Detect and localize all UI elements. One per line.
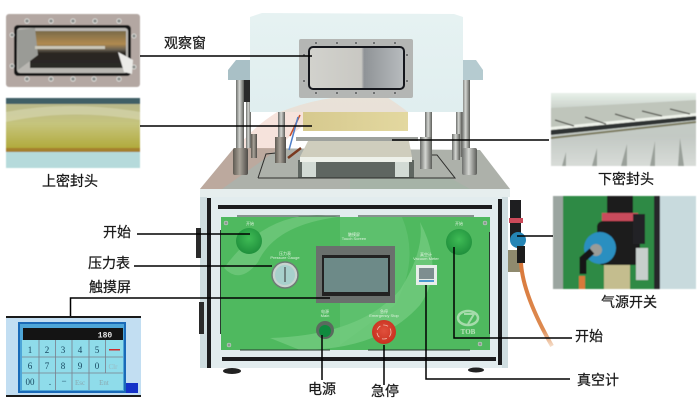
- small panel captions: [246, 220, 463, 318]
- keypad: −: [61, 376, 67, 386]
- outer columns: [236, 80, 470, 158]
- watermark arc behind machine: [205, 100, 325, 205]
- photo: air switch closeup: [553, 196, 696, 289]
- small panel captions: 电源: [321, 308, 329, 314]
- label: start right: 开始: [575, 328, 603, 344]
- emergency stop: [372, 320, 396, 344]
- panel edge marks: [220, 216, 490, 350]
- power button: [316, 321, 334, 339]
- cabinet body: [200, 197, 508, 368]
- keypad: 7: [45, 361, 50, 371]
- green control panel: [220, 215, 490, 350]
- panel swoosh watermark: [224, 215, 432, 350]
- label: lower seal head: 下密封头: [598, 171, 654, 187]
- keypad: 00: [26, 377, 35, 387]
- TOB logo: TOB: [461, 328, 476, 336]
- keypad: 6: [28, 361, 33, 371]
- label: air source switch: 气源开关: [601, 294, 657, 310]
- label: pressure gauge: 压力表: [88, 255, 130, 271]
- keypad: 4: [78, 345, 83, 355]
- touch screen: [316, 246, 395, 303]
- frame dark rails: [207, 198, 502, 368]
- inner columns: [278, 112, 462, 157]
- label: power: 电源: [308, 381, 336, 397]
- callout leader lines: [70, 56, 572, 385]
- keypad: Clr: [109, 363, 118, 371]
- keypad: 5: [95, 345, 100, 355]
- wires: [288, 115, 301, 158]
- small panel captions: Main: [321, 313, 329, 318]
- keypad: 0: [95, 361, 100, 371]
- small panel captions: 压力表: [279, 250, 291, 256]
- orange air tube: [521, 263, 552, 346]
- keypad: .: [49, 377, 51, 387]
- air regulator on machine side: [508, 200, 526, 272]
- feet: [223, 368, 484, 374]
- keypad: 8: [61, 361, 66, 371]
- photo: lower seal head closeup: [551, 93, 696, 166]
- shadow under seal plate: [298, 160, 414, 178]
- keypad: 2: [45, 345, 49, 355]
- photo: upper seal head closeup: [6, 98, 140, 168]
- small panel captions: 触摸屏: [348, 231, 360, 237]
- label: touch screen: 触摸屏: [89, 279, 131, 295]
- small panel captions: Pressure Gauge: [270, 255, 300, 260]
- keypad: 1: [28, 345, 32, 355]
- label: emergency stop: 急停: [371, 383, 399, 399]
- small panel captions: Vacuum Meter: [413, 256, 440, 261]
- outline groove on base: [258, 153, 455, 178]
- panel screws: [224, 221, 487, 347]
- label: vacuum gauge: 真空计: [577, 372, 619, 388]
- numeric display: 180: [98, 332, 112, 340]
- side top plates: [228, 60, 483, 80]
- start button left: [236, 228, 262, 254]
- keypad: Ent: [99, 379, 109, 387]
- TOB logo: [458, 311, 478, 336]
- machine: [196, 13, 552, 374]
- column collars: [233, 134, 477, 175]
- upper seal block: [303, 112, 408, 131]
- small panel captions: 真空计: [420, 251, 432, 257]
- main upper box: [250, 13, 463, 112]
- side handles: [196, 228, 204, 334]
- photo: touch screen keypad: [6, 316, 141, 397]
- keypad: Esc: [75, 379, 85, 387]
- pressure gauge: [272, 262, 298, 288]
- vacuum meter: [416, 265, 437, 285]
- base plate: [200, 148, 510, 189]
- start button right: [446, 229, 472, 255]
- small panel captions: 开始: [246, 220, 254, 226]
- keypad: 3: [61, 345, 66, 355]
- small panel captions: Emergency Stop: [369, 313, 400, 318]
- keypad: [22, 340, 123, 390]
- small panel captions: 急停: [380, 308, 388, 314]
- small panel captions: Touch Screen: [342, 236, 366, 241]
- window on box: [299, 39, 413, 98]
- label: start left: 开始: [103, 224, 131, 240]
- watermark tint on box bottom: [280, 95, 408, 112]
- label: observation window: 观察窗: [164, 35, 206, 51]
- label: upper seal head: 上密封头: [42, 173, 98, 189]
- lower seal strip and plate: [296, 137, 418, 177]
- small panel captions: 开始: [455, 220, 463, 226]
- keypad: 9: [78, 361, 83, 371]
- photo: observation window closeup: [6, 14, 140, 87]
